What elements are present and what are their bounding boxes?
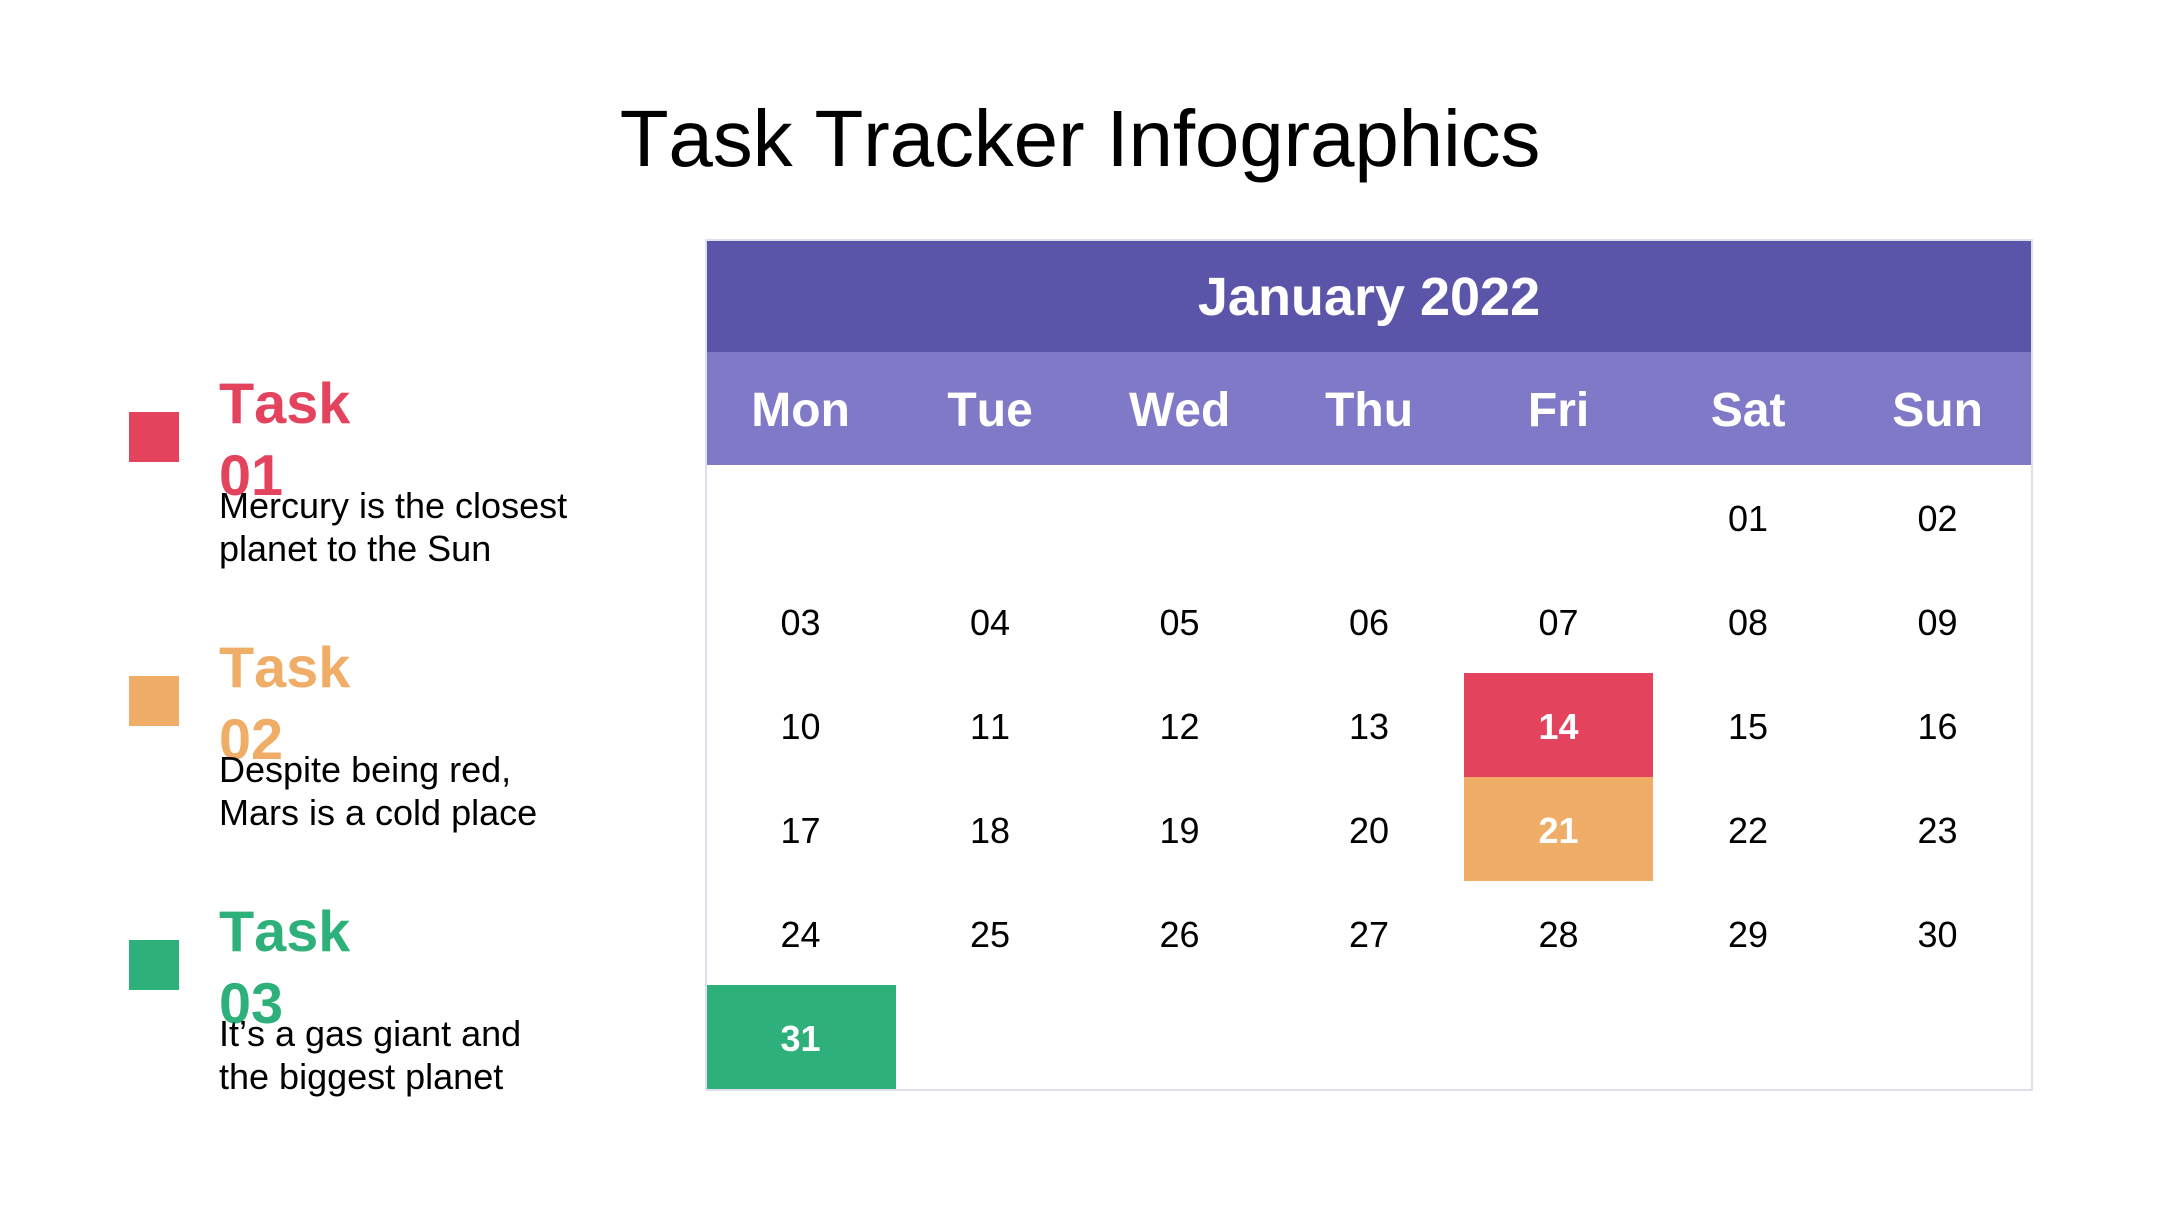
calendar date grid: 22 <box>1728 810 1768 851</box>
calendar date grid: 16 <box>1918 706 1958 747</box>
calendar month header: January 2022 <box>1198 267 1540 327</box>
task 02 description <box>219 749 537 833</box>
icon: task 02 square <box>129 676 179 726</box>
calendar date grid: 31 <box>781 1018 821 1059</box>
task 01 <box>129 372 567 569</box>
calendar date grid: 30 <box>1918 914 1958 955</box>
calendar date grid: 06 <box>1349 602 1389 643</box>
calendar date grid: 23 <box>1918 810 1958 851</box>
task 03 <box>129 900 521 1097</box>
calendar date grid: 05 <box>1160 602 1200 643</box>
calendar date grid: 10 <box>781 706 821 747</box>
calendar date grid: 14 <box>1539 706 1579 747</box>
task 01 description: planet to the Sun <box>219 528 491 569</box>
weekday header row: Sat <box>1711 384 1785 437</box>
task 03 description: the biggest planet <box>219 1056 503 1097</box>
title: Task Tracker Infographics <box>620 94 1540 183</box>
calendar date grid: 13 <box>1349 706 1389 747</box>
task 03 heading: Task 03 <box>219 900 350 1036</box>
icon: task 03 square <box>129 940 179 990</box>
calendar date grid: 09 <box>1918 602 1958 643</box>
calendar date grid: 11 <box>970 706 1010 747</box>
calendar date grid: 12 <box>1160 706 1200 747</box>
calendar date grid: 24 <box>781 914 821 955</box>
calendar date grid: 20 <box>1349 810 1389 851</box>
calendar date grid: 19 <box>1160 810 1200 851</box>
panel: calendar <box>705 239 2033 1091</box>
weekday header row <box>707 352 2031 465</box>
task 01 description: Mercury is the closest <box>219 485 567 526</box>
task 02 description: Mars is a cold place <box>219 792 537 833</box>
calendar date grid <box>781 498 1958 1059</box>
weekday header row: Sun <box>1892 384 1983 437</box>
highlight: 31 january <box>707 985 896 1089</box>
calendar date grid: 29 <box>1728 914 1768 955</box>
task 02 heading: Task 02 <box>219 636 350 772</box>
calendar date grid: 21 <box>1539 810 1579 851</box>
calendar date grid: 02 <box>1918 498 1958 539</box>
task 02 <box>129 636 537 833</box>
calendar date grid: 25 <box>970 914 1010 955</box>
calendar date grid: 27 <box>1349 914 1389 955</box>
calendar date grid: 17 <box>781 810 821 851</box>
task 01 heading: Task 01 <box>219 372 350 508</box>
weekday header row: Wed <box>1129 384 1230 437</box>
weekday header row: Fri <box>1528 384 1589 437</box>
calendar date grid: 26 <box>1160 914 1200 955</box>
calendar date grid: 04 <box>970 602 1010 643</box>
calendar date grid: 28 <box>1539 914 1579 955</box>
highlight: 21 january <box>1464 777 1652 881</box>
calendar date grid: 18 <box>970 810 1010 851</box>
weekday header row: Thu <box>1325 384 1413 437</box>
icon: task 01 square <box>129 412 179 462</box>
weekday header row: Mon <box>751 384 850 437</box>
task 02 description: Despite being red, <box>219 749 511 790</box>
calendar date grid: 03 <box>781 602 821 643</box>
calendar date grid: 15 <box>1728 706 1768 747</box>
calendar date grid: 07 <box>1539 602 1579 643</box>
task 03 description <box>219 1013 521 1097</box>
task 03 description: It’s a gas giant and <box>219 1013 521 1054</box>
highlight: 14 january <box>1464 673 1652 777</box>
weekday header row: Tue <box>947 384 1033 437</box>
task 01 description <box>219 485 567 569</box>
calendar month header <box>707 241 2031 352</box>
calendar date grid: 08 <box>1728 602 1768 643</box>
calendar date grid: 01 <box>1728 498 1768 539</box>
